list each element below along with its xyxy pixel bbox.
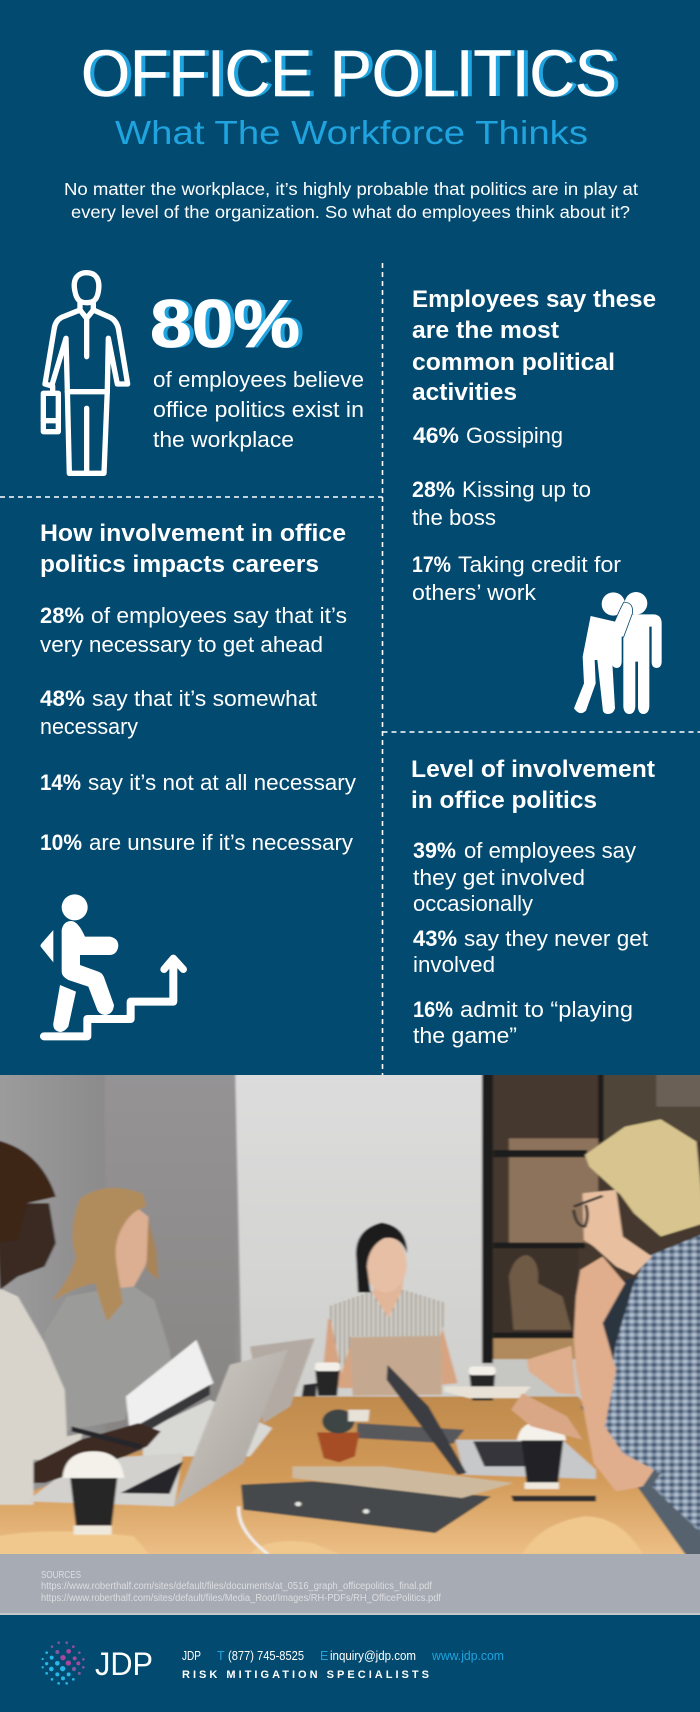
heading	[412, 286, 656, 406]
stat: gossiping: 46%	[413, 423, 459, 448]
stat: somewhat necessary	[40, 686, 317, 739]
right laptop	[455, 1440, 596, 1479]
contact line	[182, 1649, 504, 1663]
panel: common political activities	[412, 286, 662, 714]
left cup	[69, 1470, 118, 1526]
panel: 80 percent stat	[43, 273, 364, 473]
stat: never: 43%	[413, 926, 457, 951]
icon: businessman with briefcase	[43, 273, 128, 473]
heading	[411, 756, 655, 814]
stat: very necessary	[40, 603, 347, 657]
heading: in office politics	[411, 787, 597, 814]
right cup	[521, 1440, 563, 1483]
stat: occasionally: 39%	[413, 838, 456, 863]
stat: somewhat necessary: necessary	[40, 714, 138, 739]
level of involvement panel	[411, 756, 655, 1048]
intro text: every level of the organization. So what do employees think about it?	[71, 202, 630, 222]
sources band: SOURCES	[41, 1570, 81, 1581]
stat: not necessary: say it’s not at all necessary	[88, 770, 356, 795]
blonde woman	[45, 1287, 172, 1431]
stat: occasionally	[413, 838, 636, 916]
photo: team meeting around a table	[0, 1075, 700, 1554]
stat: never	[413, 926, 648, 977]
stat: taking credit: Taking credit for	[458, 552, 621, 577]
table surface	[0, 1396, 700, 1557]
folders	[241, 1481, 491, 1533]
stat: kissing up	[412, 477, 591, 530]
stat description: the workplace	[153, 427, 294, 452]
footer	[41, 1641, 504, 1685]
stat: somewhat necessary: 48%	[40, 686, 85, 711]
heading: politics impacts careers	[40, 551, 319, 578]
stat: very necessary: 28%	[40, 603, 84, 628]
title: OFFICE POLITICS	[81, 36, 617, 110]
subtitle: What The Workforce Thinks	[115, 114, 588, 151]
cups at far end	[315, 1365, 340, 1396]
heading	[40, 520, 346, 578]
contact line: (877) 745-8525	[228, 1649, 304, 1663]
stat: unsure: are unsure if it’s necessary	[89, 830, 353, 855]
stat description: office politics exist in	[153, 397, 364, 422]
stat: somewhat necessary: say that it’s somewhat	[92, 686, 317, 711]
stat: occasionally: they get involved	[413, 865, 585, 890]
icon: person climbing stairs with arrow	[40, 894, 183, 1036]
centre woman	[324, 1318, 355, 1388]
stat: gossiping: Gossiping	[466, 423, 563, 448]
sources band	[0, 1554, 700, 1615]
heading: Employees say these	[412, 286, 656, 313]
tagline: RISK MITIGATION SPECIALISTS	[182, 1669, 429, 1681]
big stat 80%: 80%	[150, 286, 300, 362]
logo wordmark: JDP	[95, 1646, 153, 1682]
man on right	[598, 1277, 638, 1370]
intro text	[64, 179, 638, 222]
contact line: inquiry@jdp.com	[330, 1649, 416, 1663]
heading: activities	[412, 379, 517, 406]
stat description	[153, 367, 364, 452]
stat: never: involved	[413, 952, 495, 977]
contact line: E	[320, 1649, 328, 1663]
stat: kissing up: Kissing up to	[462, 477, 591, 502]
left laptop	[27, 1453, 183, 1506]
big stat 80%: 80%	[154, 286, 304, 362]
stat: very necessary: of employees say that it’s	[91, 603, 347, 628]
stat: very necessary: very necessary to get ahead	[40, 632, 323, 657]
heading: are the most	[412, 317, 559, 344]
contact line: JDP	[182, 1649, 201, 1663]
stat description: of employees believe	[153, 367, 364, 392]
stat: occasionally: occasionally	[413, 891, 533, 916]
stat: taking credit: others’ work	[412, 580, 537, 605]
heading: common political	[412, 349, 615, 376]
stat: occasionally: of employees say	[464, 838, 636, 863]
sources band: https://www.roberthalf.com/sites/default/files/Media_Root/Images/RH-PDFs/RH_OfficePolitics.pdf	[41, 1593, 441, 1604]
woman on left	[0, 1287, 83, 1505]
contact line: T	[217, 1649, 225, 1663]
stat: taking credit: 17%	[412, 552, 451, 577]
stat: playing the game: admit to “playing	[460, 997, 633, 1022]
logo: JDP dot cluster	[41, 1641, 85, 1685]
icon: two people whispering	[574, 592, 662, 714]
stat: playing the game	[413, 997, 633, 1048]
stat: taking credit	[412, 552, 621, 605]
stat: playing the game: 16%	[413, 997, 453, 1022]
stat: unsure: 10%	[40, 830, 82, 855]
intro text: No matter the workplace, it’s highly probable that politics are in play at	[64, 179, 638, 199]
notebook and plant	[357, 1423, 464, 1444]
sources band: https://www.roberthalf.com/sites/default/files/documents/at_0516_graph_officepolitics_final.pdf	[41, 1581, 432, 1592]
title: OFFICE POLITICS	[85, 36, 621, 110]
stat: kissing up: the boss	[412, 505, 496, 530]
stat: kissing up: 28%	[412, 477, 455, 502]
open book	[126, 1340, 213, 1430]
stat: gossiping	[413, 423, 563, 448]
papers behind laptop	[143, 1400, 272, 1456]
stat: never: say they never get	[464, 926, 648, 951]
back laptops	[250, 1338, 315, 1423]
heading: Level of involvement	[411, 756, 655, 783]
heading: How involvement in office	[40, 520, 346, 547]
stat: playing the game: the game”	[413, 1023, 517, 1048]
stat: not necessary: 14%	[40, 770, 81, 795]
panel: career impact	[40, 520, 356, 1036]
contact line: www.jdp.com	[431, 1649, 504, 1663]
